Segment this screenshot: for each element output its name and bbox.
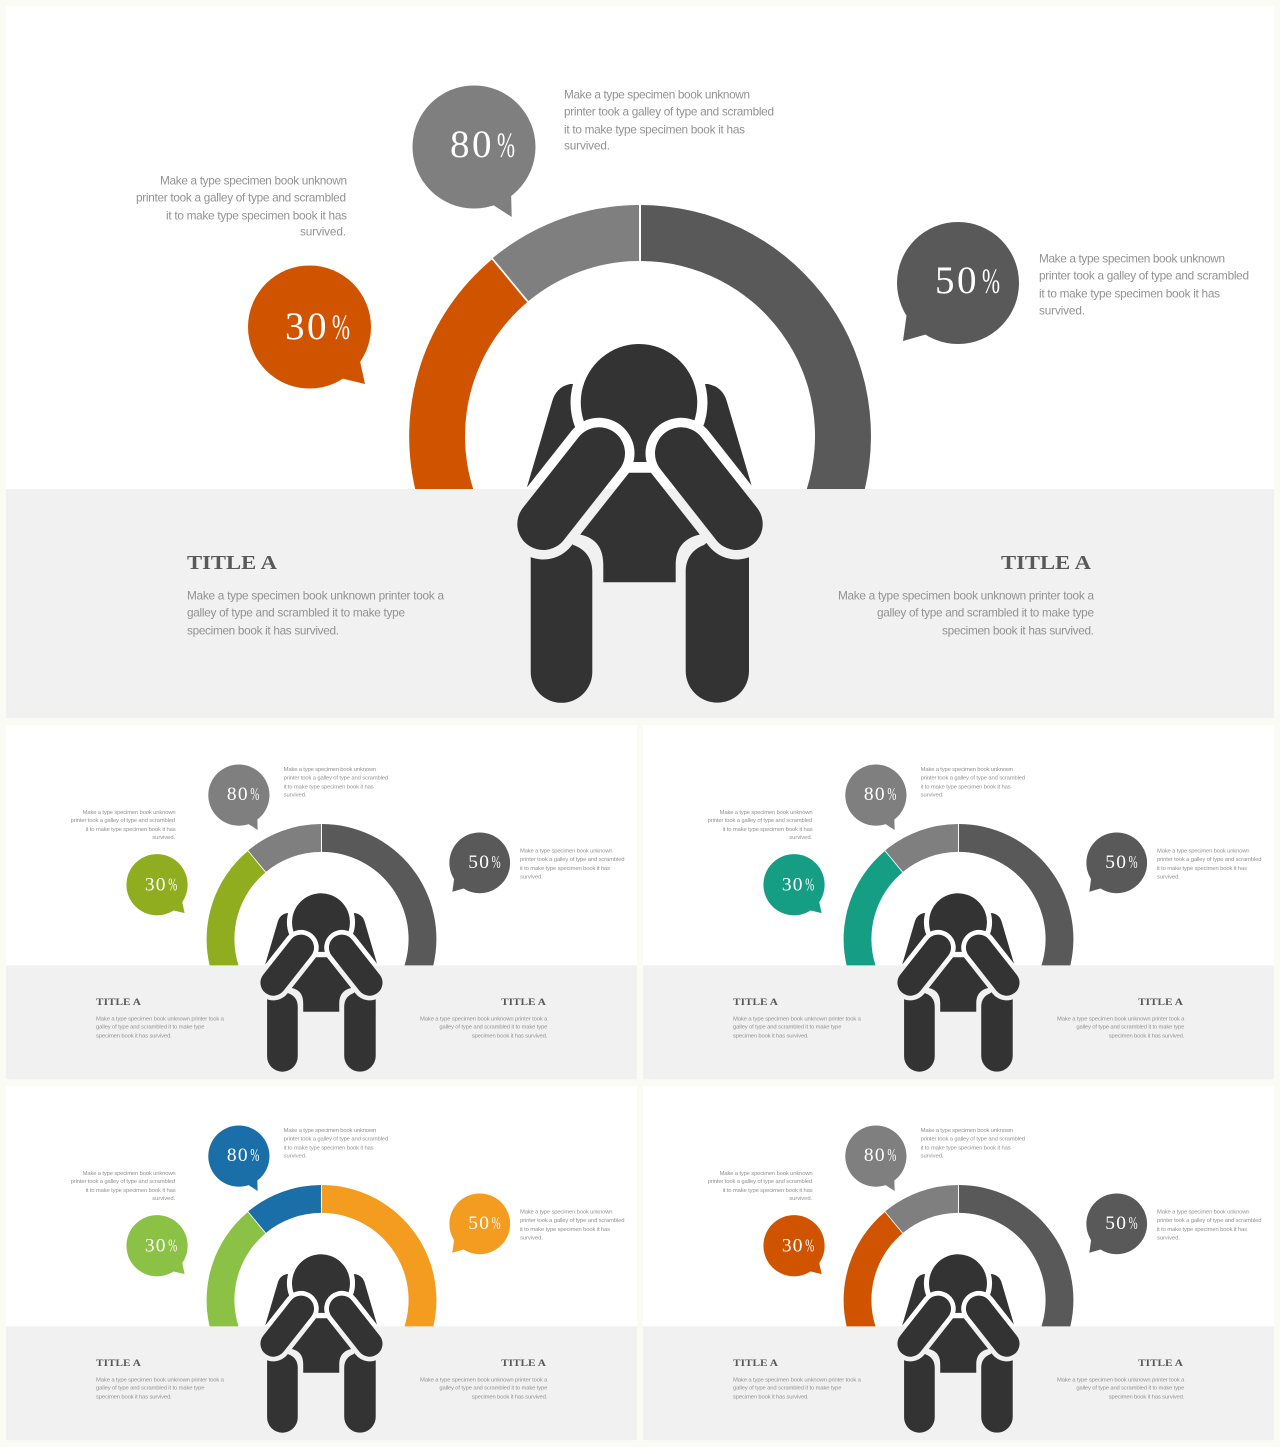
panel: teal variant xyxy=(643,725,1274,1079)
chart: semicircle ring xyxy=(207,1185,436,1326)
text block: left: Make a type specimen book unknown xyxy=(720,810,813,816)
text block: right: survived. xyxy=(1157,1235,1180,1241)
callout: 80%: 80% xyxy=(227,784,259,805)
text block: lower left xyxy=(733,1016,862,1040)
text block: top: it to make type specimen book it has xyxy=(564,122,745,136)
text block: lower left: specimen book it has survived. xyxy=(733,1395,809,1401)
text block: lower right: galley of type and scrambled it to make type xyxy=(1076,1025,1184,1031)
text block: lower right: specimen book it has survived. xyxy=(942,623,1094,637)
text block: lower left: Make a type specimen book unknown printer took a xyxy=(733,1377,862,1383)
text block: right: survived. xyxy=(1157,874,1180,880)
callout: 80%: 80% xyxy=(450,123,515,166)
text block: left: survived. xyxy=(300,224,346,238)
text block: top: Make a type specimen book unknown xyxy=(921,767,1013,773)
text block: top: survived. xyxy=(564,138,610,152)
callout: 50% xyxy=(449,1193,510,1254)
text block: lower right: galley of type and scrambled it to make type xyxy=(439,1025,547,1031)
callout: 80% xyxy=(412,86,536,217)
text block: top: Make a type specimen book unknown xyxy=(284,767,376,773)
text block: top: survived. xyxy=(284,792,307,798)
callout: 50% xyxy=(897,222,1019,344)
callout: 50%: 50% xyxy=(1105,852,1138,873)
text block: lower right: specimen book it has survived. xyxy=(472,1395,548,1401)
text block: top: Make a type specimen book unknown xyxy=(284,1128,376,1134)
callout: 50%: 50% xyxy=(1105,1213,1138,1234)
callout: 50% xyxy=(1086,832,1147,893)
callout: 80%: 80% xyxy=(864,1145,896,1166)
text block: right: it to make type specimen book it has xyxy=(520,1227,610,1233)
text block: lower left xyxy=(96,1377,225,1401)
text block: top xyxy=(921,767,1025,798)
callout: 30% xyxy=(126,854,188,915)
text block: left: survived. xyxy=(152,835,176,841)
callout: 80% xyxy=(845,1126,906,1191)
text block: top: survived. xyxy=(921,792,944,798)
text block: left xyxy=(708,1171,813,1202)
text block: right xyxy=(1157,849,1262,880)
text block: right: Make a type specimen book unknown xyxy=(1157,849,1250,855)
callout: 80%: 80% xyxy=(864,784,896,805)
callout: 80% xyxy=(208,765,269,830)
icon: person covering face xyxy=(527,344,752,703)
text block: right: it to make type specimen book it has xyxy=(1157,1227,1247,1233)
text block: top: Make a type specimen book unknown xyxy=(564,87,750,101)
text block: top: printer took a galley of type and scrambled xyxy=(921,1136,1025,1142)
text block: right xyxy=(1157,1210,1262,1241)
callout: 50% xyxy=(449,832,510,893)
heading: right title: TITLE A xyxy=(1138,997,1183,1008)
text block: top xyxy=(284,1128,388,1159)
text block: lower right: specimen book it has survived. xyxy=(1109,1395,1185,1401)
text block: lower left: Make a type specimen book unknown printer took a xyxy=(187,588,444,602)
text block: left: it to make type specimen book it has xyxy=(723,827,813,833)
text block: lower right xyxy=(1057,1377,1185,1401)
text block: lower left: Make a type specimen book unknown printer took a xyxy=(96,1016,225,1022)
text block: lower right: galley of type and scrambled it to make type xyxy=(1076,1386,1184,1392)
text block: left: printer took a galley of type and scrambled xyxy=(708,818,812,824)
callout: 30% xyxy=(763,1215,825,1276)
text block: left: survived. xyxy=(789,1196,813,1202)
text block: top: printer took a galley of type and scrambled xyxy=(564,104,774,118)
text block: top xyxy=(564,87,774,152)
panel: main large diagram xyxy=(6,6,1274,718)
icon: person covering face xyxy=(265,893,377,1072)
text block: lower left xyxy=(96,1016,225,1040)
heading: left title: TITLE A xyxy=(733,997,778,1008)
text block: right: printer took a galley of type and scrambled xyxy=(520,857,625,863)
text block: lower right xyxy=(420,1016,548,1040)
text block: left xyxy=(71,810,176,841)
text block: left xyxy=(71,1171,176,1202)
chart: semicircle ring xyxy=(844,824,1073,965)
text block: left: it to make type specimen book it has xyxy=(723,1188,813,1194)
text block: lower right: Make a type specimen book unknown printer took a xyxy=(420,1016,548,1022)
text block: lower right: specimen book it has survived. xyxy=(1109,1034,1185,1040)
text block: right xyxy=(520,849,625,880)
text block: lower right xyxy=(1057,1016,1185,1040)
text block: top: it to make type specimen book it has xyxy=(284,1145,374,1151)
text block: right: printer took a galley of type and scrambled xyxy=(1157,857,1262,863)
text block: left: printer took a galley of type and scrambled xyxy=(136,190,346,204)
panel: multicolour variant xyxy=(6,1086,637,1440)
callout: 30%: 30% xyxy=(145,1236,177,1257)
text block: lower left: galley of type and scrambled it to make type xyxy=(187,605,405,619)
callout: 50% xyxy=(1086,1193,1147,1254)
callout: 30% xyxy=(763,854,825,915)
text block: top: printer took a galley of type and scrambled xyxy=(284,775,388,781)
text block: right: Make a type specimen book unknown xyxy=(1039,251,1225,265)
text block: top: Make a type specimen book unknown xyxy=(921,1128,1013,1134)
text block: right: it to make type specimen book it has xyxy=(1157,866,1247,872)
chart: semicircle ring xyxy=(409,205,871,489)
text block: left: printer took a galley of type and scrambled xyxy=(708,1179,812,1185)
text block: lower right: Make a type specimen book unknown printer took a xyxy=(1057,1377,1185,1383)
callout: 50%: 50% xyxy=(468,852,501,873)
text block: lower left: specimen book it has survived. xyxy=(733,1034,809,1040)
text block: left: Make a type specimen book unknown xyxy=(720,1171,813,1177)
callout: 30%: 30% xyxy=(145,875,177,896)
text block: top: printer took a galley of type and scrambled xyxy=(284,1136,388,1142)
icon: person covering face xyxy=(265,1254,377,1433)
text block: lower left: specimen book it has survived. xyxy=(187,623,339,637)
callout: 80% xyxy=(845,765,906,830)
heading: right title: TITLE A xyxy=(501,1358,546,1369)
text block: lower left: galley of type and scrambled it to make type xyxy=(733,1025,842,1031)
text block: top: it to make type specimen book it has xyxy=(921,784,1011,790)
text block: right: it to make type specimen book it has xyxy=(520,866,610,872)
text block: right: survived. xyxy=(520,874,543,880)
text block: right: printer took a galley of type and scrambled xyxy=(520,1218,625,1224)
callout: 30%: 30% xyxy=(285,305,350,348)
callout: 80% xyxy=(208,1126,269,1191)
text block: right: printer took a galley of type and scrambled xyxy=(1039,268,1249,282)
text block: right: survived. xyxy=(520,1235,543,1241)
text block: left: it to make type specimen book it has xyxy=(86,1188,176,1194)
text block: left: Make a type specimen book unknown xyxy=(83,1171,176,1177)
heading: left title: TITLE A xyxy=(96,1358,141,1369)
callout: 30%: 30% xyxy=(782,1236,814,1257)
text block: right: Make a type specimen book unknown xyxy=(520,849,613,855)
text block: lower left: Make a type specimen book unknown printer took a xyxy=(96,1377,225,1383)
text block: lower right xyxy=(838,588,1094,637)
chart: semicircle ring xyxy=(207,824,436,965)
text block: right: Make a type specimen book unknown xyxy=(520,1210,613,1216)
text block: lower left xyxy=(733,1377,862,1401)
panel: green variant xyxy=(6,725,637,1079)
text block: top: it to make type specimen book it has xyxy=(921,1145,1011,1151)
chart: semicircle ring xyxy=(844,1185,1073,1326)
text block: lower left: Make a type specimen book unknown printer took a xyxy=(733,1016,862,1022)
callout: 50%: 50% xyxy=(935,259,1000,302)
text block: lower right xyxy=(420,1377,548,1401)
icon: person covering face xyxy=(902,1254,1014,1433)
text block: lower left: specimen book it has survived. xyxy=(96,1395,172,1401)
text block: left: Make a type specimen book unknown xyxy=(160,173,347,187)
text block: right: printer took a galley of type and scrambled xyxy=(1157,1218,1262,1224)
text block: left: it to make type specimen book it has xyxy=(86,827,176,833)
callout: 30% xyxy=(248,266,371,388)
text block: left xyxy=(708,810,813,841)
text block: lower left: specimen book it has survived. xyxy=(96,1034,172,1040)
text block: lower left: galley of type and scrambled it to make type xyxy=(96,1386,205,1392)
text block: top xyxy=(921,1128,1025,1159)
text block: left: it to make type specimen book it has xyxy=(166,208,347,222)
text block: right xyxy=(520,1210,625,1241)
heading: left title: TITLE A xyxy=(187,553,277,574)
heading: left title: TITLE A xyxy=(96,997,141,1008)
callout: 30% xyxy=(126,1215,188,1276)
callout: 30%: 30% xyxy=(782,875,814,896)
text block: left: survived. xyxy=(789,835,813,841)
text block: top: printer took a galley of type and scrambled xyxy=(921,775,1025,781)
text block: top: survived. xyxy=(921,1153,944,1159)
text block: lower right: specimen book it has survived. xyxy=(472,1034,548,1040)
text block: left: Make a type specimen book unknown xyxy=(83,810,176,816)
text block: left: printer took a galley of type and scrambled xyxy=(71,1179,175,1185)
text block: top xyxy=(284,767,388,798)
text block: lower left: galley of type and scrambled it to make type xyxy=(96,1025,205,1031)
text block: lower right: Make a type specimen book unknown printer took a xyxy=(420,1377,548,1383)
heading: right title: TITLE A xyxy=(1001,553,1091,574)
icon: person covering face xyxy=(902,893,1014,1072)
text block: lower left xyxy=(187,588,444,637)
callout: 50%: 50% xyxy=(468,1213,501,1234)
callout: 80%: 80% xyxy=(227,1145,259,1166)
text block: right: Make a type specimen book unknown xyxy=(1157,1210,1250,1216)
text block: lower left: galley of type and scrambled it to make type xyxy=(733,1386,842,1392)
text block: top: survived. xyxy=(284,1153,307,1159)
panel: orange variant xyxy=(643,1086,1274,1440)
heading: right title: TITLE A xyxy=(501,997,546,1008)
text block: lower right: Make a type specimen book unknown printer took a xyxy=(838,588,1094,602)
text block: left: printer took a galley of type and scrambled xyxy=(71,818,175,824)
text block: right: survived. xyxy=(1039,303,1085,317)
heading: right title: TITLE A xyxy=(1138,1358,1183,1369)
text block: left: survived. xyxy=(152,1196,176,1202)
text block: top: it to make type specimen book it has xyxy=(284,784,374,790)
text block: lower right: Make a type specimen book unknown printer took a xyxy=(1057,1016,1185,1022)
text block: right xyxy=(1039,251,1249,317)
text block: left xyxy=(136,173,347,238)
heading: left title: TITLE A xyxy=(733,1358,778,1369)
text block: lower right: galley of type and scrambled it to make type xyxy=(439,1386,547,1392)
text block: right: it to make type specimen book it has xyxy=(1039,286,1220,300)
text block: lower right: galley of type and scrambled it to make type xyxy=(877,605,1094,619)
